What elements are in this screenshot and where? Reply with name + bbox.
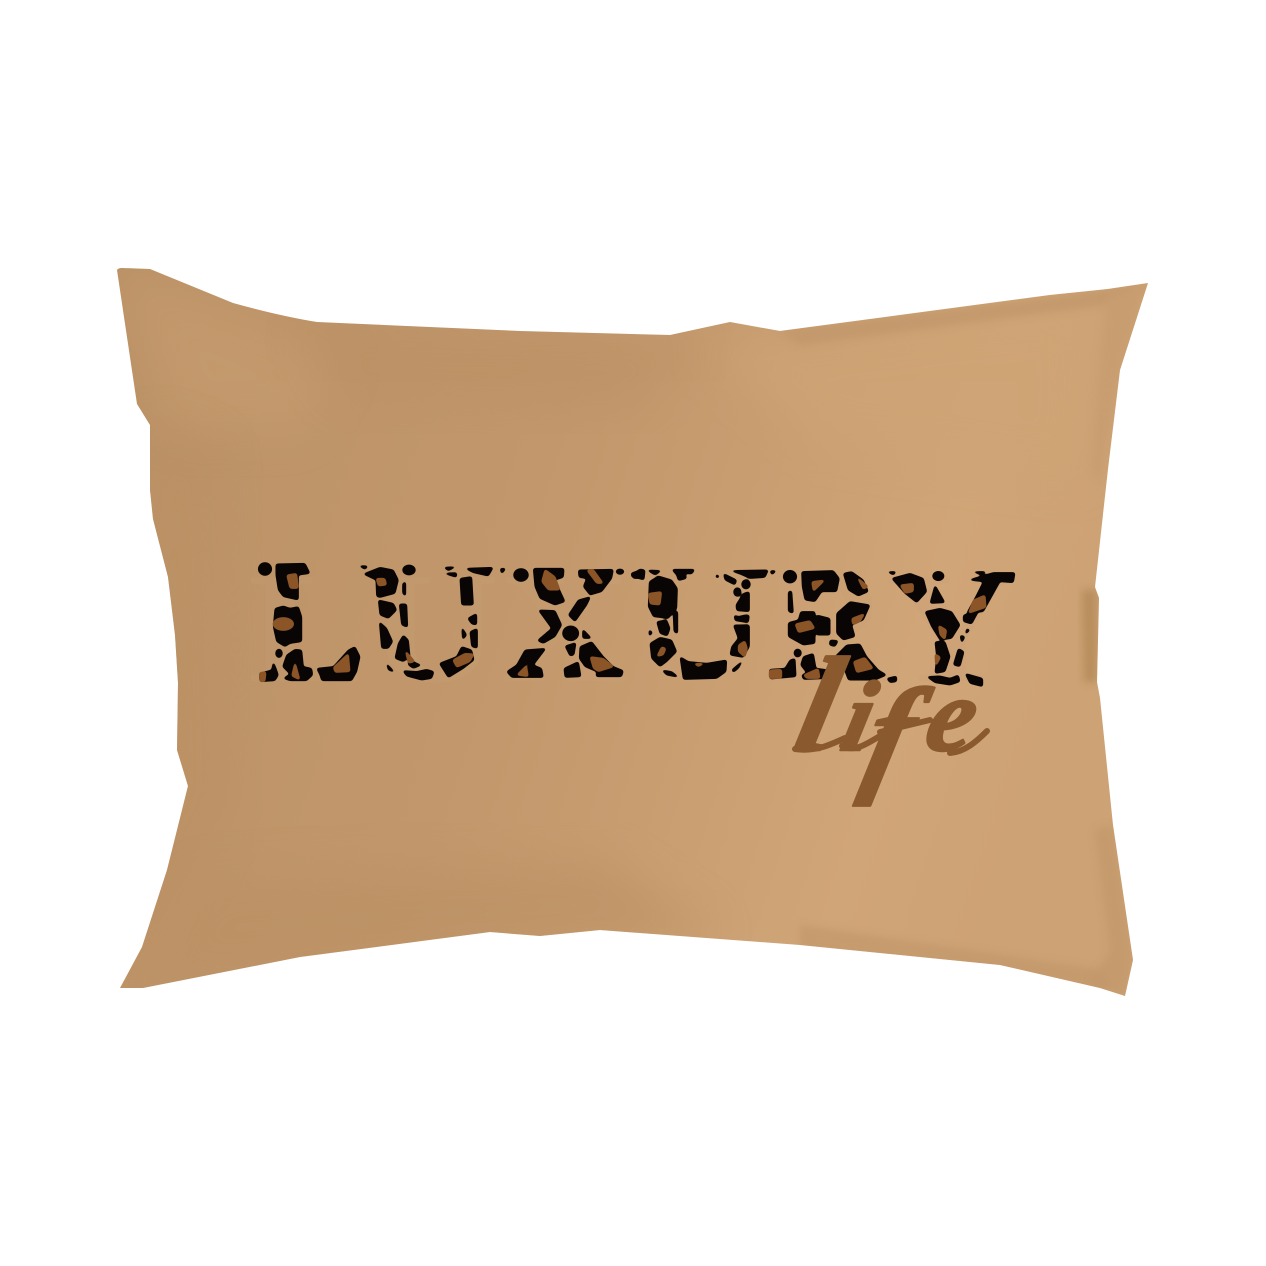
script word: life: l [784,630,856,780]
pillow illustration [117,268,1148,996]
leopard print: right letters [630,569,1015,687]
swash strokes [795,720,987,753]
leopard print: left letters [258,563,640,682]
script word: life: e [917,657,990,773]
pillow body [117,268,1148,996]
script word: life: f [853,664,940,807]
heading: LUXURY: LUXURY [248,541,1016,716]
script word: life: i [833,661,886,772]
script word: life [778,630,996,807]
